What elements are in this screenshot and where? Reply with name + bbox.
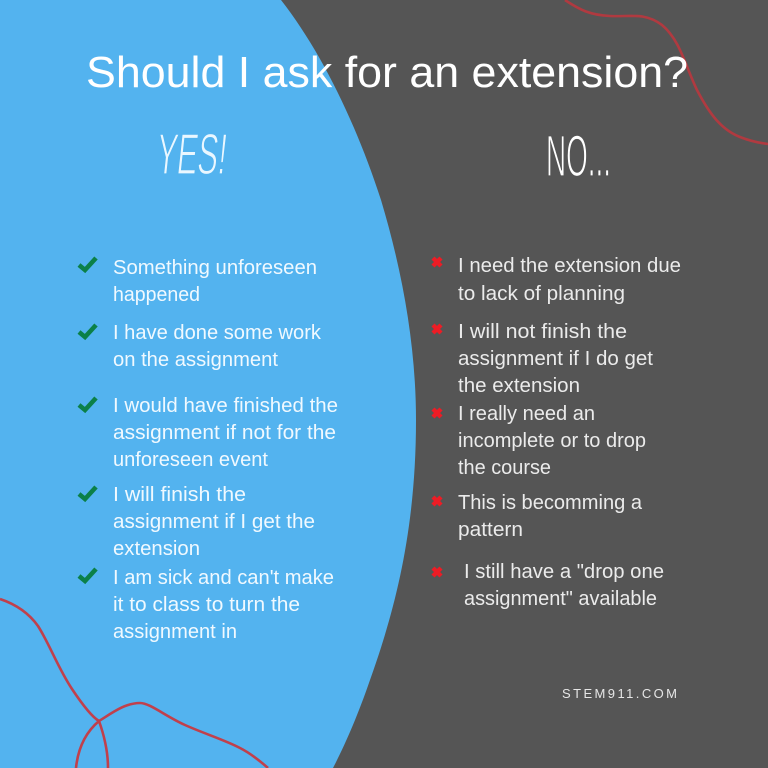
yes item 4: I will finish the [113, 484, 246, 506]
yes item 4: extension [113, 538, 200, 560]
no item 3: I really need an [458, 403, 595, 425]
yes item 3: unforeseen event [113, 449, 268, 471]
yes item 5 [79, 567, 334, 643]
yes item 3: I would have finished the [113, 395, 338, 417]
yes item 2: I have done some work [113, 322, 322, 344]
decoration: red curve top right [565, 0, 768, 144]
yes item 3: assignment if not for the [113, 422, 336, 444]
no item 2: assignment if I do get [458, 348, 653, 370]
no item 4: pattern [458, 519, 523, 541]
yes item 2 [79, 322, 322, 371]
website credit: STEM911.COM [562, 686, 677, 701]
list: yes reasons [79, 257, 338, 643]
yes item 5: I am sick and can't make [113, 567, 334, 589]
yes item 1: happened [113, 284, 200, 306]
no item 5: I still have a "drop one [464, 561, 664, 583]
yes item 4 [79, 484, 315, 560]
yes item 3 [79, 395, 338, 471]
no item 5: assignment" available [464, 588, 657, 610]
no item 4: This is becomming a [458, 492, 643, 514]
decoration: red curves bottom left [0, 599, 268, 768]
yes item 1: Something unforeseen [113, 257, 317, 279]
no item 4 [433, 492, 643, 541]
no item 3: the course [458, 457, 551, 479]
title: Should I ask for an extension? [86, 48, 688, 97]
yes item 5: it to class to turn the [113, 594, 300, 616]
no item 2: the extension [458, 375, 580, 397]
no item 3 [433, 403, 646, 479]
list: no reasons [433, 255, 681, 610]
text: NO... [546, 124, 611, 189]
no item 2: I will not finish the [458, 321, 627, 343]
no item 1 [433, 255, 681, 305]
yes item 1 [79, 257, 317, 306]
no item 5 [433, 561, 664, 610]
yes item 5: assignment in [113, 621, 237, 643]
heading: yes: YES! [154, 122, 230, 187]
yes item 4: assignment if I get the [113, 511, 315, 533]
no item 1: to lack of planning [458, 283, 625, 305]
no item 3: incomplete or to drop [458, 430, 646, 452]
panel: blue yes side [0, 0, 416, 768]
yes item 2: on the assignment [113, 349, 278, 371]
no item 1: I need the extension due [458, 255, 681, 277]
no item 2 [433, 321, 653, 397]
